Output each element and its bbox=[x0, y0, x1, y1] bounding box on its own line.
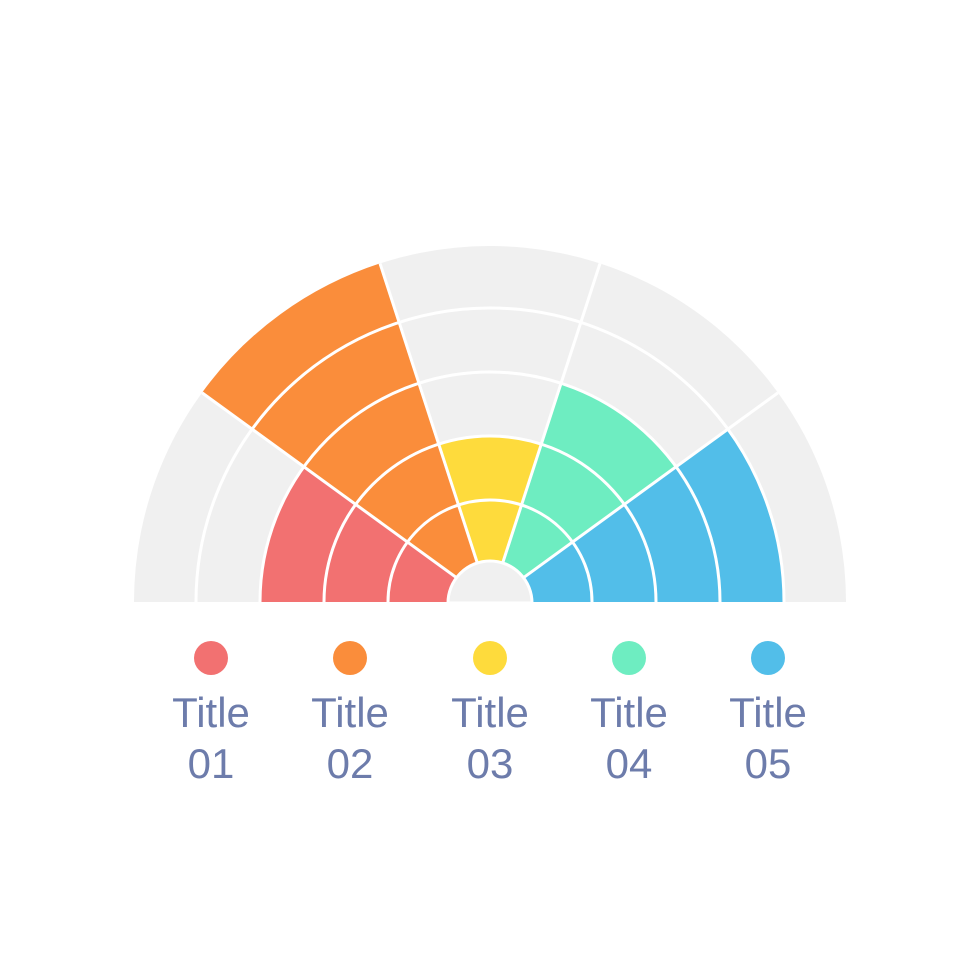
legend item 05 bbox=[729, 641, 807, 787]
legend item 04: 04 bbox=[606, 740, 652, 787]
segment 03 yellow bbox=[439, 436, 541, 602]
segment 02 orange bbox=[202, 263, 490, 602]
legend item 03 bbox=[451, 641, 529, 787]
legend item 01 bbox=[172, 641, 250, 787]
legend item 01: 01 bbox=[188, 740, 234, 787]
background semicircle bbox=[134, 246, 846, 602]
legend item 02 bbox=[311, 641, 389, 787]
legend item 05: Title bbox=[729, 689, 807, 736]
segment 05 blue bbox=[490, 429, 784, 602]
segment 01 red bbox=[260, 467, 490, 602]
segment 04 green bbox=[490, 383, 676, 602]
center hole bbox=[448, 561, 532, 603]
legend item 01: Title bbox=[172, 689, 250, 736]
legend item 02: Title bbox=[311, 689, 389, 736]
legend item 04 bbox=[590, 641, 668, 787]
legend item 04: Title bbox=[590, 689, 668, 736]
legend item 02: 02 bbox=[327, 740, 373, 787]
legend item 03: 03 bbox=[467, 740, 513, 787]
legend bbox=[172, 641, 807, 787]
legend item 05: 05 bbox=[745, 740, 791, 787]
legend item 03: Title bbox=[451, 689, 529, 736]
